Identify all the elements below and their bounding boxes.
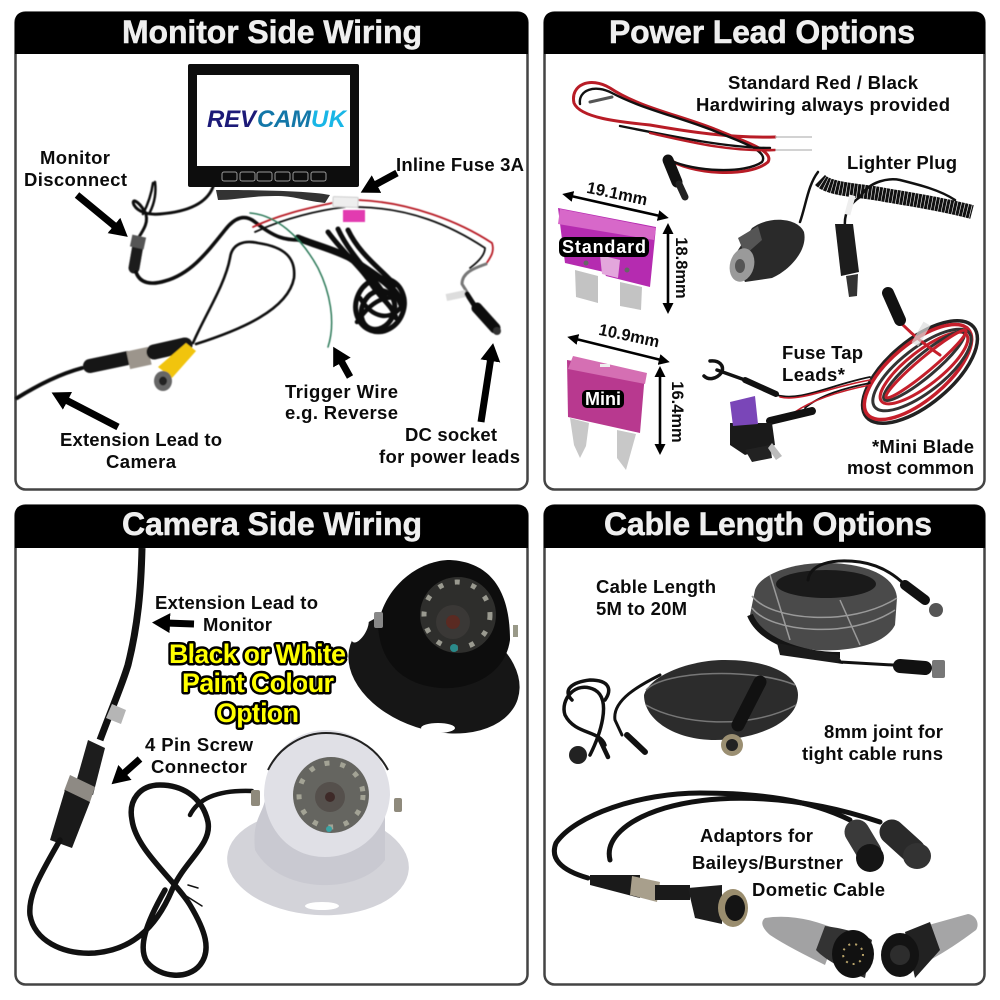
label: cable length	[596, 576, 716, 619]
label: inline fuse: Inline Fuse 3A	[396, 154, 524, 175]
label: standard lead: Hardwiring always provided	[696, 94, 950, 115]
arrow: inline fuse	[373, 173, 397, 186]
panel: monitor side wiring	[15, 12, 528, 490]
fuse tap wires, wrench and holder	[704, 361, 870, 462]
monitor logo: REV	[207, 106, 258, 133]
label: 8mm joint: tight cable runs	[802, 743, 943, 764]
label: fuse tap leads: Fuse Tap	[782, 342, 863, 363]
arrow: DC socket	[481, 357, 491, 422]
label: extension lead to monitor: Extension Lead to	[155, 592, 318, 613]
camera cable	[30, 548, 252, 975]
label: DC socket	[379, 424, 520, 467]
mini fuse	[567, 356, 647, 470]
label: extension lead	[60, 429, 222, 472]
dimension: 10.9mm: 10.9mm	[597, 321, 661, 351]
DC socket	[446, 290, 501, 335]
adaptor cable	[554, 793, 931, 927]
label: adaptors	[692, 825, 885, 900]
standard fuse	[558, 208, 656, 310]
panel: cable length options	[544, 505, 985, 984]
callout: paint colour	[169, 639, 346, 728]
heading bar: cable length options: Cable Length Options	[604, 506, 932, 542]
heading bar: camera side wiring	[15, 505, 528, 548]
label: 4 pin connector: Connector	[151, 756, 247, 777]
arrow: monitor disconnect	[77, 195, 117, 228]
heading bar: cable length options	[544, 505, 985, 548]
fuse tap lead bundle	[846, 293, 994, 442]
label: extension lead: Camera	[106, 451, 177, 472]
dimension: 18.8mm: 18.8mm	[672, 237, 690, 299]
label: mini blade note: most common	[847, 457, 974, 478]
dimension: 19.1mm	[571, 179, 660, 216]
label: 8mm joint	[802, 721, 943, 764]
monitor logo: CAM	[257, 106, 312, 133]
dimension: 19.1mm: 19.1mm	[585, 179, 649, 209]
panel: power lead options	[544, 12, 994, 490]
arrow: extension lead	[64, 399, 118, 427]
label: monitor disconnect: Disconnect	[24, 169, 127, 190]
heading bar: camera side wiring: Camera Side Wiring	[122, 506, 422, 542]
monitor	[188, 64, 359, 203]
label: trigger wire: e.g. Reverse	[285, 402, 398, 423]
monitor logo: UK	[311, 106, 348, 133]
label: trigger wire	[285, 381, 398, 423]
label: extension lead to monitor	[155, 592, 318, 635]
dimension: 10.9mm	[576, 321, 661, 360]
arrow: trigger wire	[340, 359, 350, 377]
dimension: 16.4mm: 16.4mm	[668, 381, 686, 443]
wiring harness photo	[17, 182, 501, 398]
heading bar: power lead options: Power Lead Options	[609, 14, 915, 50]
label: fuse tap leads: Leads*	[782, 364, 846, 385]
lighter plug	[726, 172, 972, 297]
standard red and black lead	[573, 83, 812, 197]
label: adaptors: Dometic Cable	[752, 879, 885, 900]
callout: paint colour: Paint Colour	[182, 668, 334, 698]
label: monitor disconnect: Monitor	[40, 147, 110, 168]
arrow: 4 pin connector	[122, 759, 140, 775]
label: 8mm joint: 8mm joint for	[824, 721, 943, 742]
white camera	[224, 730, 412, 921]
heading bar: power lead options	[544, 12, 985, 54]
label: standard lead	[696, 72, 950, 115]
small cable reel and connectors	[564, 660, 798, 764]
monitor logo	[207, 106, 348, 133]
label: trigger wire: Trigger Wire	[285, 381, 398, 402]
heading bar: monitor side wiring: Monitor Side Wiring	[122, 14, 422, 50]
panel: camera side wiring	[15, 505, 536, 984]
label: mini blade note: *Mini Blade	[872, 436, 974, 457]
dimension: 16.4mm	[660, 375, 686, 446]
callout: paint colour: Option	[216, 698, 299, 728]
trigger wire	[250, 213, 332, 347]
grey connectors	[762, 914, 978, 978]
label: DC socket: DC socket	[405, 424, 497, 445]
dimension: 18.8mm	[668, 232, 690, 305]
label: cable length: Cable Length	[596, 576, 716, 597]
label: monitor disconnect	[24, 147, 127, 190]
label: 4 pin connector: 4 Pin Screw	[145, 734, 254, 755]
monitor cable and disconnect	[130, 182, 213, 268]
label: adaptors: Baileys/Burstner	[692, 852, 843, 873]
label: standard lead: Standard Red / Black	[728, 72, 919, 93]
power wires	[253, 200, 493, 292]
arrow: extension lead to monitor	[166, 623, 194, 624]
label: extension lead to monitor: Monitor	[203, 614, 272, 635]
label: lighter plug: Lighter Plug	[847, 152, 957, 173]
camera connector cables	[17, 242, 294, 398]
label: extension lead: Extension Lead to	[60, 429, 222, 450]
label: mini blade note	[847, 436, 974, 478]
label: fuse tap leads	[782, 342, 863, 385]
yellow connector	[154, 343, 196, 391]
label: 4 pin connector	[145, 734, 254, 777]
label: mini: Mini	[585, 389, 621, 409]
label: cable length: 5M to 20M	[596, 598, 687, 619]
inline fuse	[333, 197, 365, 222]
label: DC socket: for power leads	[379, 446, 520, 467]
monitor buttons	[222, 172, 326, 181]
large cable reel	[750, 561, 945, 678]
heading bar: monitor side wiring	[15, 12, 528, 54]
black camera	[332, 560, 536, 754]
label: standard: Standard	[562, 237, 646, 257]
label: adaptors: Adaptors for	[700, 825, 813, 846]
callout: paint colour: Black or White	[169, 639, 346, 669]
main trunk cable and coil	[136, 218, 412, 339]
